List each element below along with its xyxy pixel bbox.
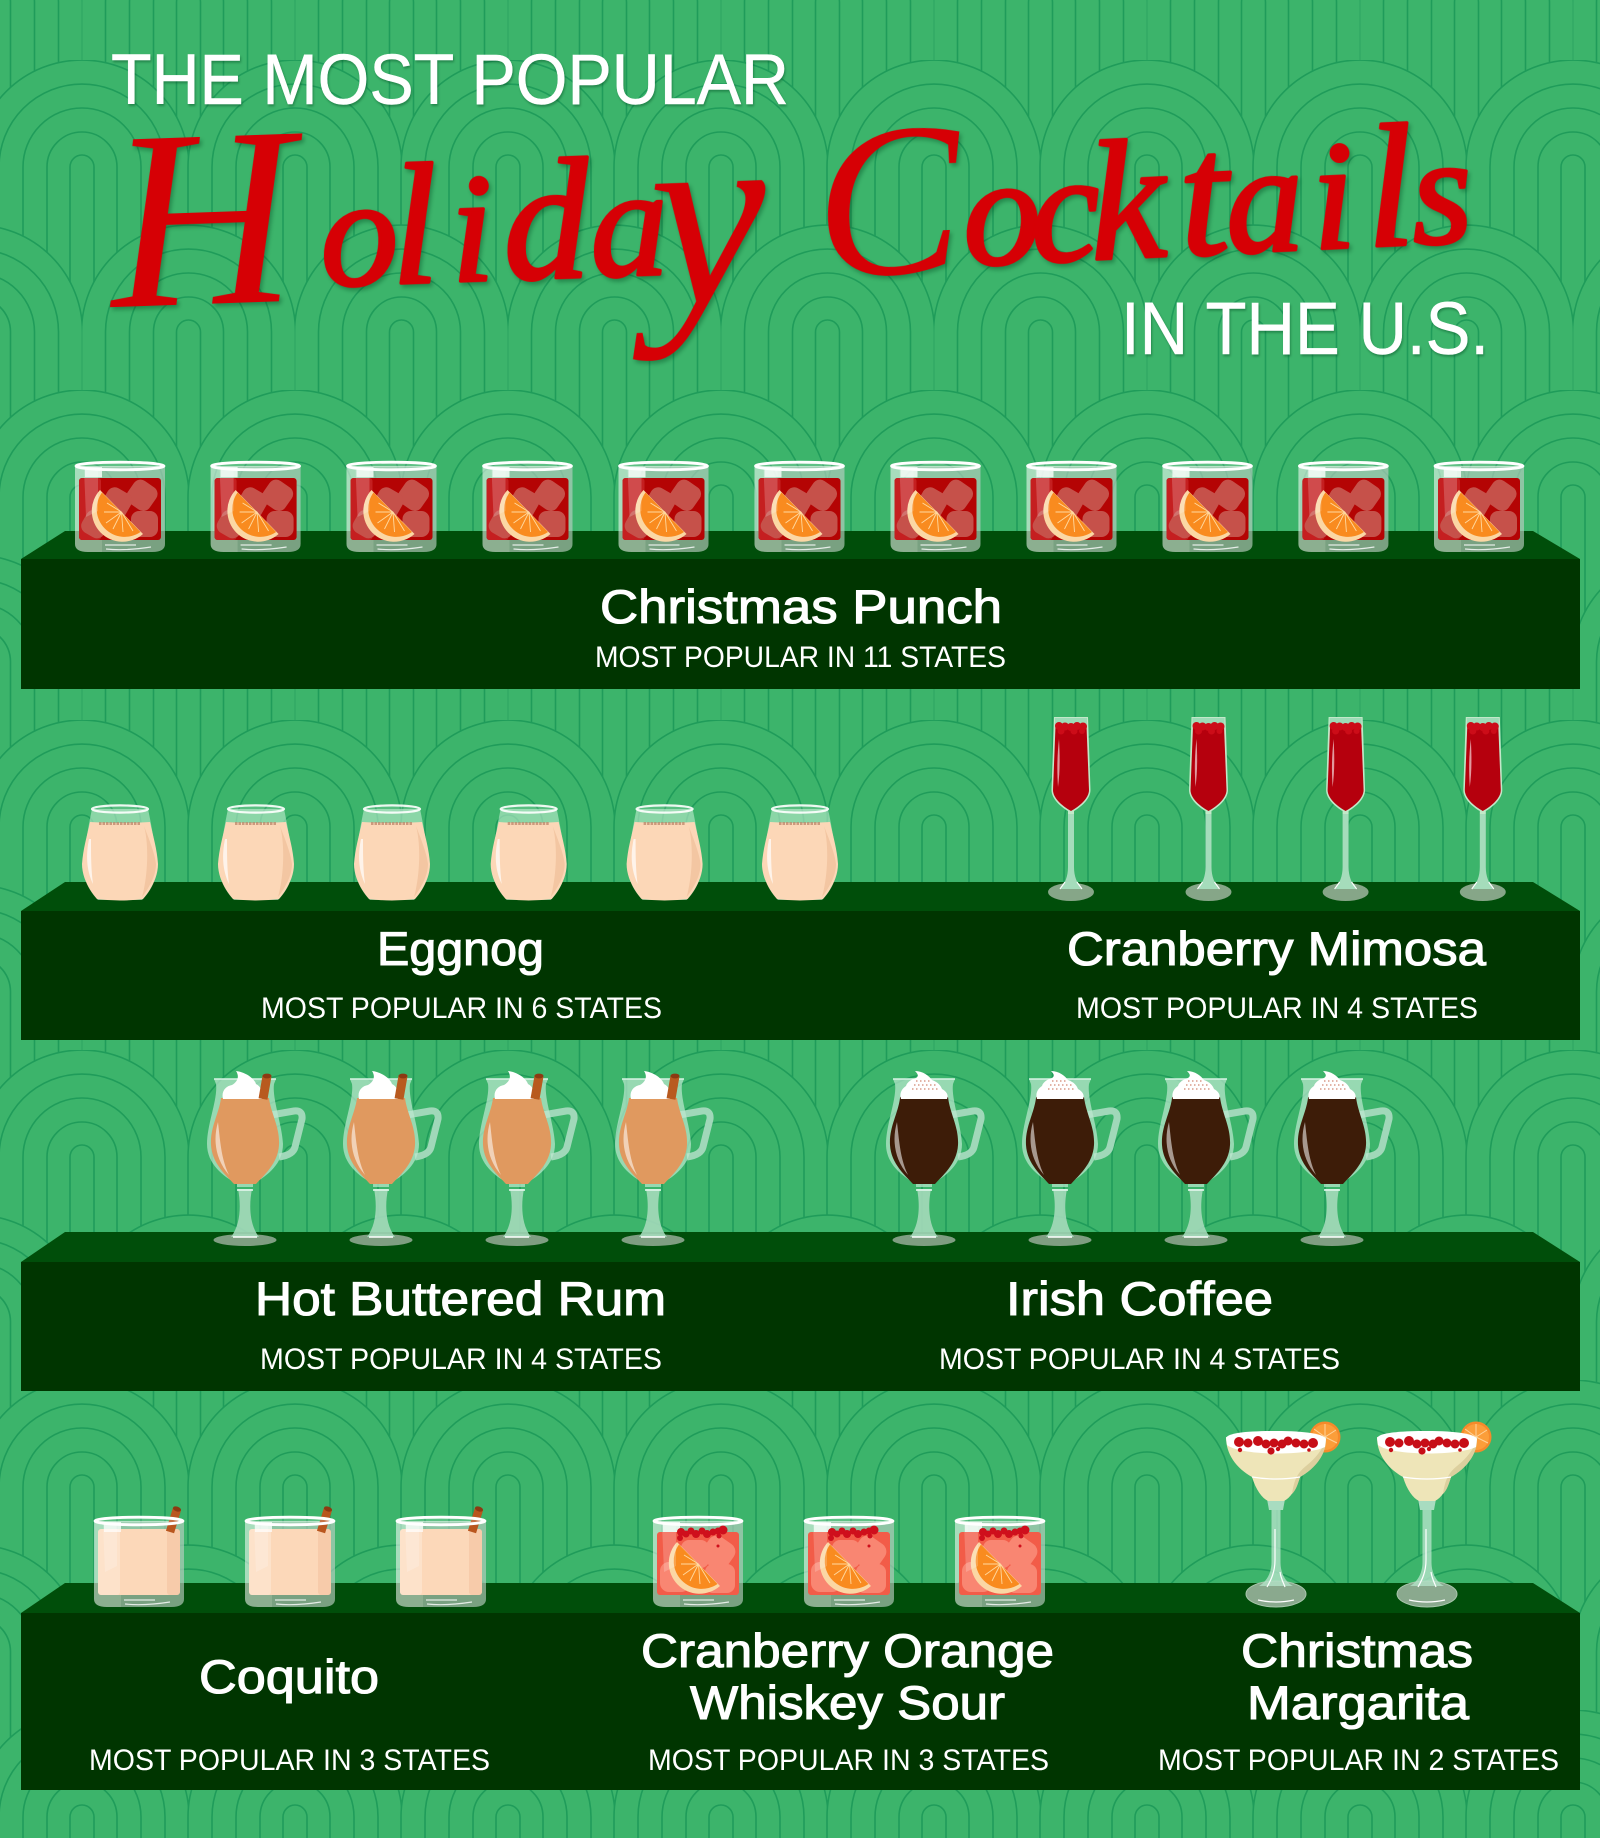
title line: the most popular: THE MOST POPULAR <box>111 41 789 120</box>
shelf top <box>21 531 1580 559</box>
glasses: four cranberry mimosa <box>1048 717 1506 901</box>
title script: holiday: l <box>387 130 441 321</box>
title <box>102 41 1489 380</box>
title script: cocktails: o <box>959 124 1044 299</box>
title script: cocktails: k <box>1085 105 1172 296</box>
title script: cocktails: C <box>810 77 969 325</box>
label: 4 states: MOST POPULAR IN 4 STATES <box>260 1343 662 1376</box>
title script: cocktails: c <box>1027 121 1103 296</box>
title script: holiday: o <box>317 145 401 320</box>
label: cranberry orange whiskey sour: Whiskey Sour <box>690 1676 1005 1729</box>
panel: shelf 3 hot buttered rum and irish coffee <box>21 1071 1580 1391</box>
shelf front <box>21 559 1580 689</box>
panel: shelf 4 coquito, whiskey sour, margarita <box>21 1422 1580 1790</box>
shelf top <box>21 882 1580 911</box>
shelf front <box>21 1613 1580 1790</box>
title script: cocktails: t <box>1175 97 1237 293</box>
title script: holiday: y <box>620 67 774 362</box>
glasses: three coquito <box>94 1505 486 1607</box>
title script: cocktails: i <box>1307 109 1358 283</box>
label: 2 states: MOST POPULAR IN 2 STATES <box>1158 1744 1559 1777</box>
shelf front <box>21 1262 1580 1391</box>
label: 11 states: MOST POPULAR IN 11 STATES <box>595 641 1006 674</box>
glasses: four hot buttered rum <box>207 1071 710 1246</box>
label: 4 states: MOST POPULAR IN 4 STATES <box>939 1343 1340 1376</box>
glasses: three cranberry orange whiskey sour <box>653 1517 1045 1607</box>
label: christmas punch: Christmas Punch <box>600 580 1002 633</box>
title script: holiday: i <box>447 142 496 315</box>
label: cranberry orange whiskey sour: Cranberry Orange <box>641 1624 1054 1677</box>
title script: cocktails: l <box>1360 88 1418 284</box>
glasses: eleven christmas punch <box>75 462 1524 552</box>
title script: holiday: d <box>500 124 593 317</box>
label: eggnog: Eggnog <box>377 922 544 975</box>
label: 6 states: MOST POPULAR IN 6 STATES <box>261 992 662 1025</box>
label: 3 states: MOST POPULAR IN 3 STATES <box>89 1744 490 1777</box>
shelf front <box>21 911 1580 1040</box>
panel: shelf 2 eggnog and cranberry mimosa <box>21 717 1580 1040</box>
title script: holiday: a <box>587 136 671 310</box>
label: 4 states: MOST POPULAR IN 4 STATES <box>1076 992 1478 1025</box>
title line: in the u.s.: IN THE U.S. <box>1121 287 1489 370</box>
label: cranberry mimosa: Cranberry Mimosa <box>1067 922 1487 975</box>
panel: shelf 1 christmas punch <box>21 462 1580 689</box>
label: hot buttered rum: Hot Buttered Rum <box>255 1272 666 1325</box>
title script: holiday: H <box>102 74 311 363</box>
label: christmas margarita: Christmas <box>1241 1624 1473 1677</box>
label: 3 states: MOST POPULAR IN 3 STATES <box>648 1744 1049 1777</box>
title script: cocktails: s <box>1407 103 1476 278</box>
title script: cocktails: a <box>1221 111 1307 287</box>
label: christmas margarita: Margarita <box>1247 1676 1470 1729</box>
glasses: six eggnog <box>82 805 838 900</box>
glasses: two christmas margarita <box>1226 1422 1492 1607</box>
label: irish coffee: Irish Coffee <box>1006 1272 1273 1325</box>
shelf top <box>21 1583 1580 1613</box>
glasses: four irish coffee <box>886 1071 1389 1246</box>
shelf top <box>21 1232 1580 1262</box>
label: coquito: Coquito <box>199 1650 379 1703</box>
